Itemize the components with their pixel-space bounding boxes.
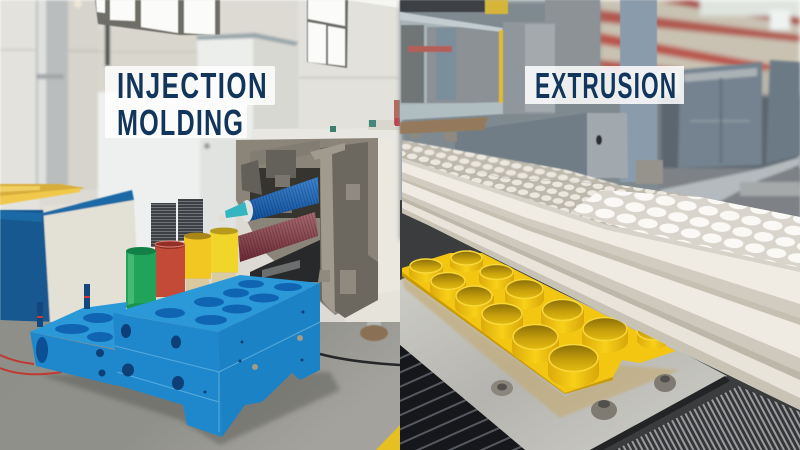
ribbed extruded sheet — [402, 150, 800, 268]
gray column block — [503, 22, 555, 114]
heading: injection molding — [105, 66, 275, 143]
black cable — [320, 354, 400, 365]
white pipe one — [402, 158, 800, 318]
colored plastic sleeves — [126, 228, 238, 311]
mesh guard box — [400, 12, 505, 120]
blue equipment table with yellow rollers — [0, 184, 140, 322]
yellow sleeve back — [210, 228, 238, 284]
large block top — [113, 275, 320, 332]
yellow tray with cups — [402, 251, 676, 394]
yellow floor marking — [376, 425, 400, 450]
white pipe three — [402, 197, 800, 410]
pins — [37, 284, 90, 327]
red air cables — [0, 355, 62, 374]
heading: extrusion: EXTRUSION — [535, 67, 676, 106]
yellow sleeve front — [184, 232, 211, 292]
floor shadow — [40, 372, 340, 445]
block holes — [155, 280, 302, 325]
window right — [307, 0, 400, 68]
ribbed sheet far edge — [402, 140, 620, 185]
blue ribbed tube with nozzle — [218, 177, 319, 222]
wood spacer — [400, 117, 488, 142]
block seam lines — [115, 322, 320, 432]
metal bolts — [491, 374, 676, 420]
metal screws — [252, 335, 303, 370]
metal plate — [400, 250, 727, 450]
green sleeve — [126, 247, 156, 311]
lower dark machine bed — [400, 200, 800, 450]
panel: injection molding photo — [0, 0, 400, 450]
small bracket — [636, 160, 663, 184]
black ribbed cylinders — [151, 199, 203, 247]
red ribbed tube — [238, 212, 318, 262]
black upper bar — [400, 0, 485, 12]
red sleeve — [155, 241, 185, 304]
plate dark edge — [590, 376, 730, 450]
gray base block — [455, 113, 628, 178]
small block left — [30, 302, 127, 386]
black tube — [250, 240, 320, 282]
blurred factory background — [400, 0, 800, 240]
factory wall background — [0, 0, 400, 330]
blue steel column — [620, 0, 657, 182]
gray panels behind — [545, 0, 600, 70]
window left — [95, 0, 220, 35]
white pipe two — [402, 178, 800, 372]
heading: injection molding: MOLDING — [117, 103, 243, 143]
heading: injection molding: INJECTION — [117, 66, 267, 106]
yellow post — [485, 0, 508, 14]
injection machine body — [236, 100, 400, 322]
large block front face — [113, 313, 222, 437]
cup rows — [409, 251, 670, 387]
ribbed metal hoses — [615, 386, 800, 450]
floor — [0, 320, 400, 450]
tray reflection shadow — [402, 276, 680, 418]
machine foot — [360, 318, 388, 341]
side holes — [121, 310, 304, 394]
right background cages — [660, 60, 800, 228]
panel: extrusion photo — [400, 0, 800, 450]
white cabinet — [98, 33, 298, 252]
corrugated black hoses — [400, 345, 525, 450]
large block right face — [218, 283, 320, 437]
blue plastic block — [30, 275, 320, 437]
